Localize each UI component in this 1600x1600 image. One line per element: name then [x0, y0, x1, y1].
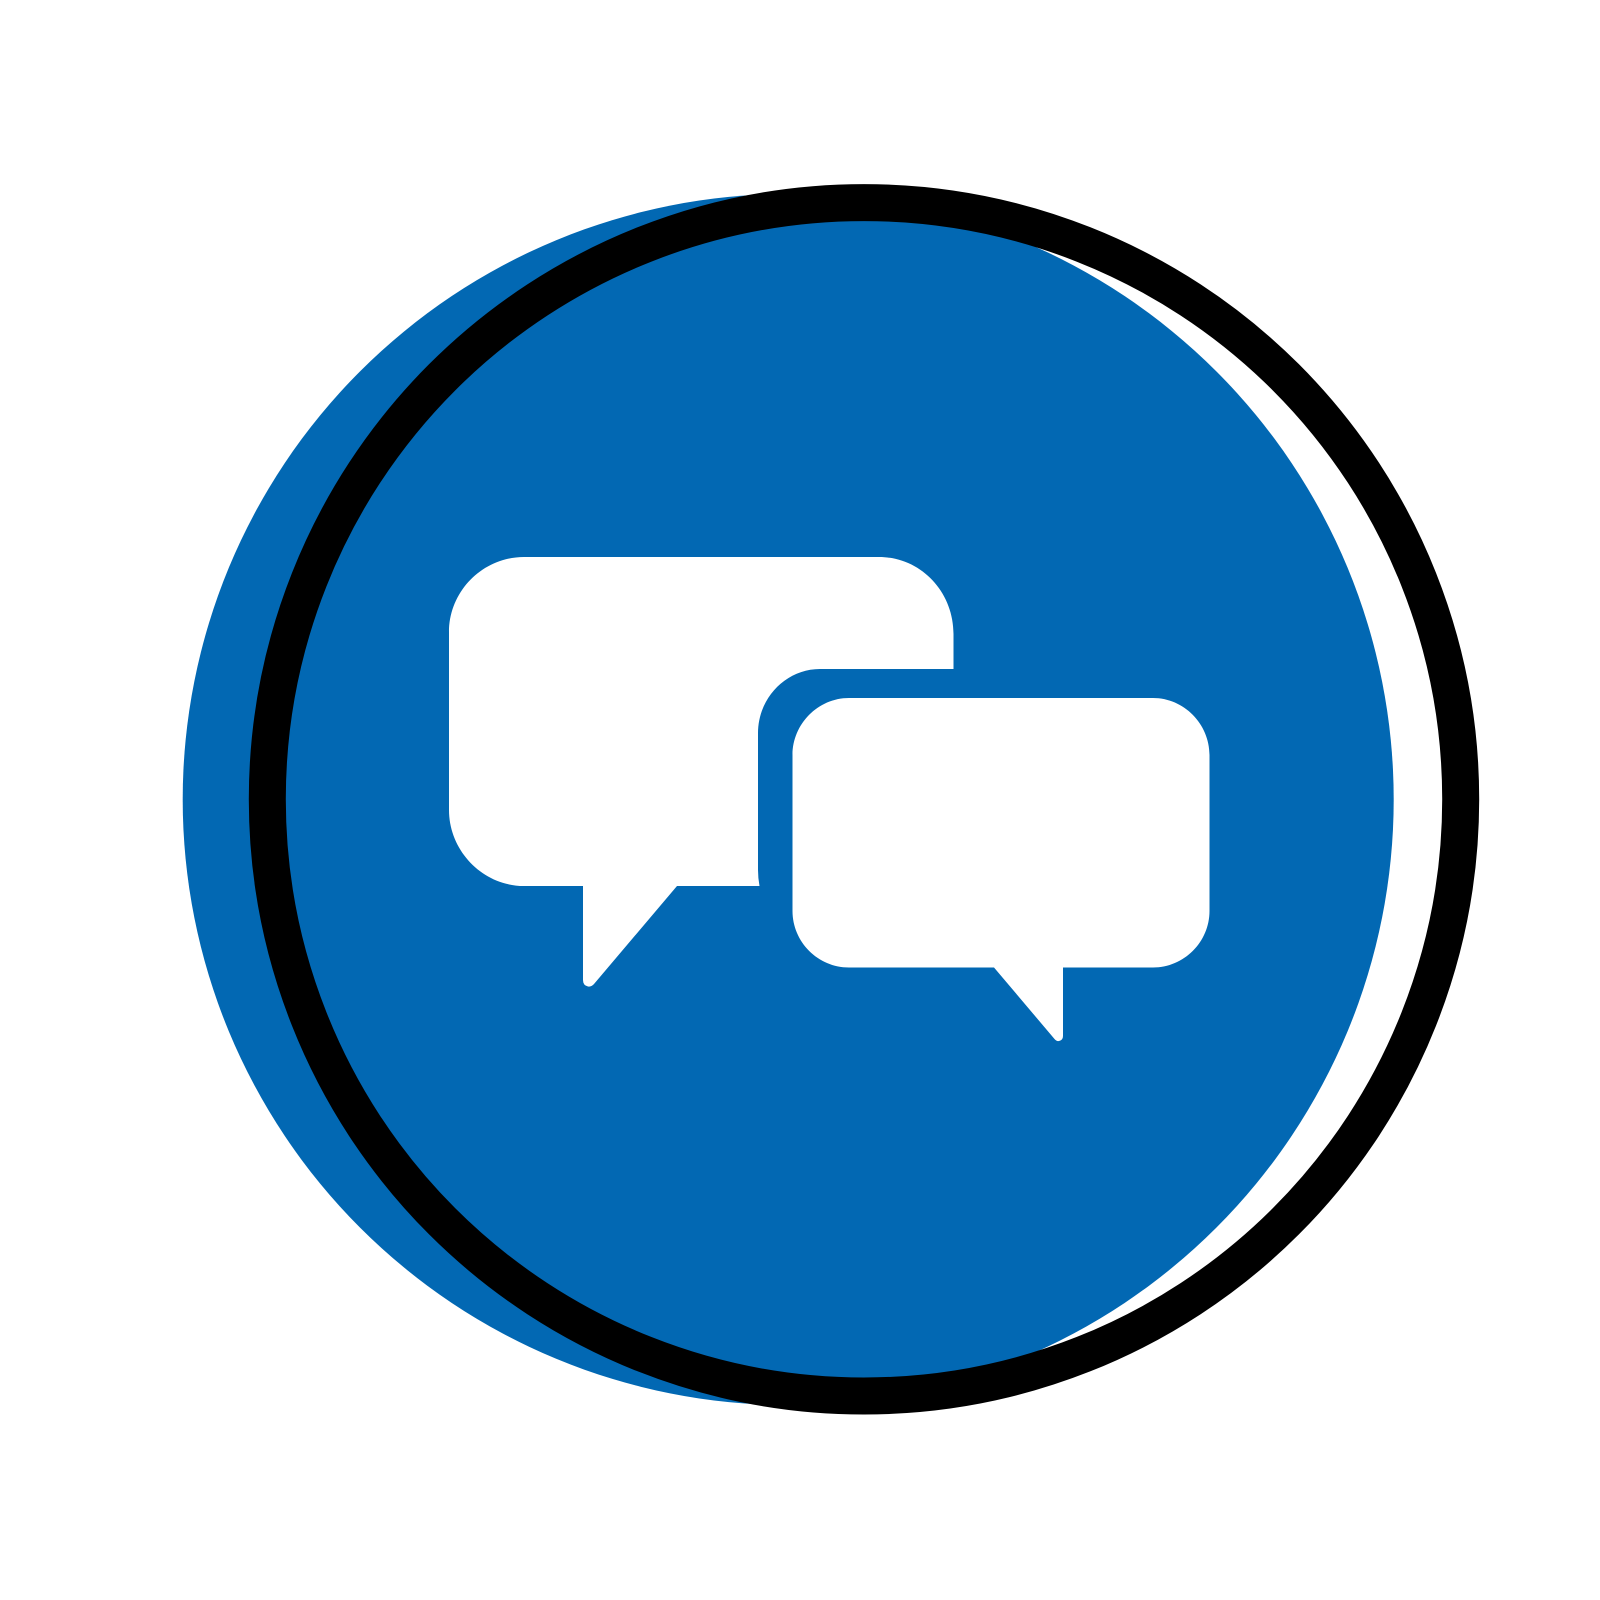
icon: large speech bubble: [449, 557, 954, 987]
black offset ring: [267, 203, 1461, 1396]
blue filled circle: [183, 194, 1394, 1405]
icon: small speech bubble: [792, 698, 1210, 1041]
